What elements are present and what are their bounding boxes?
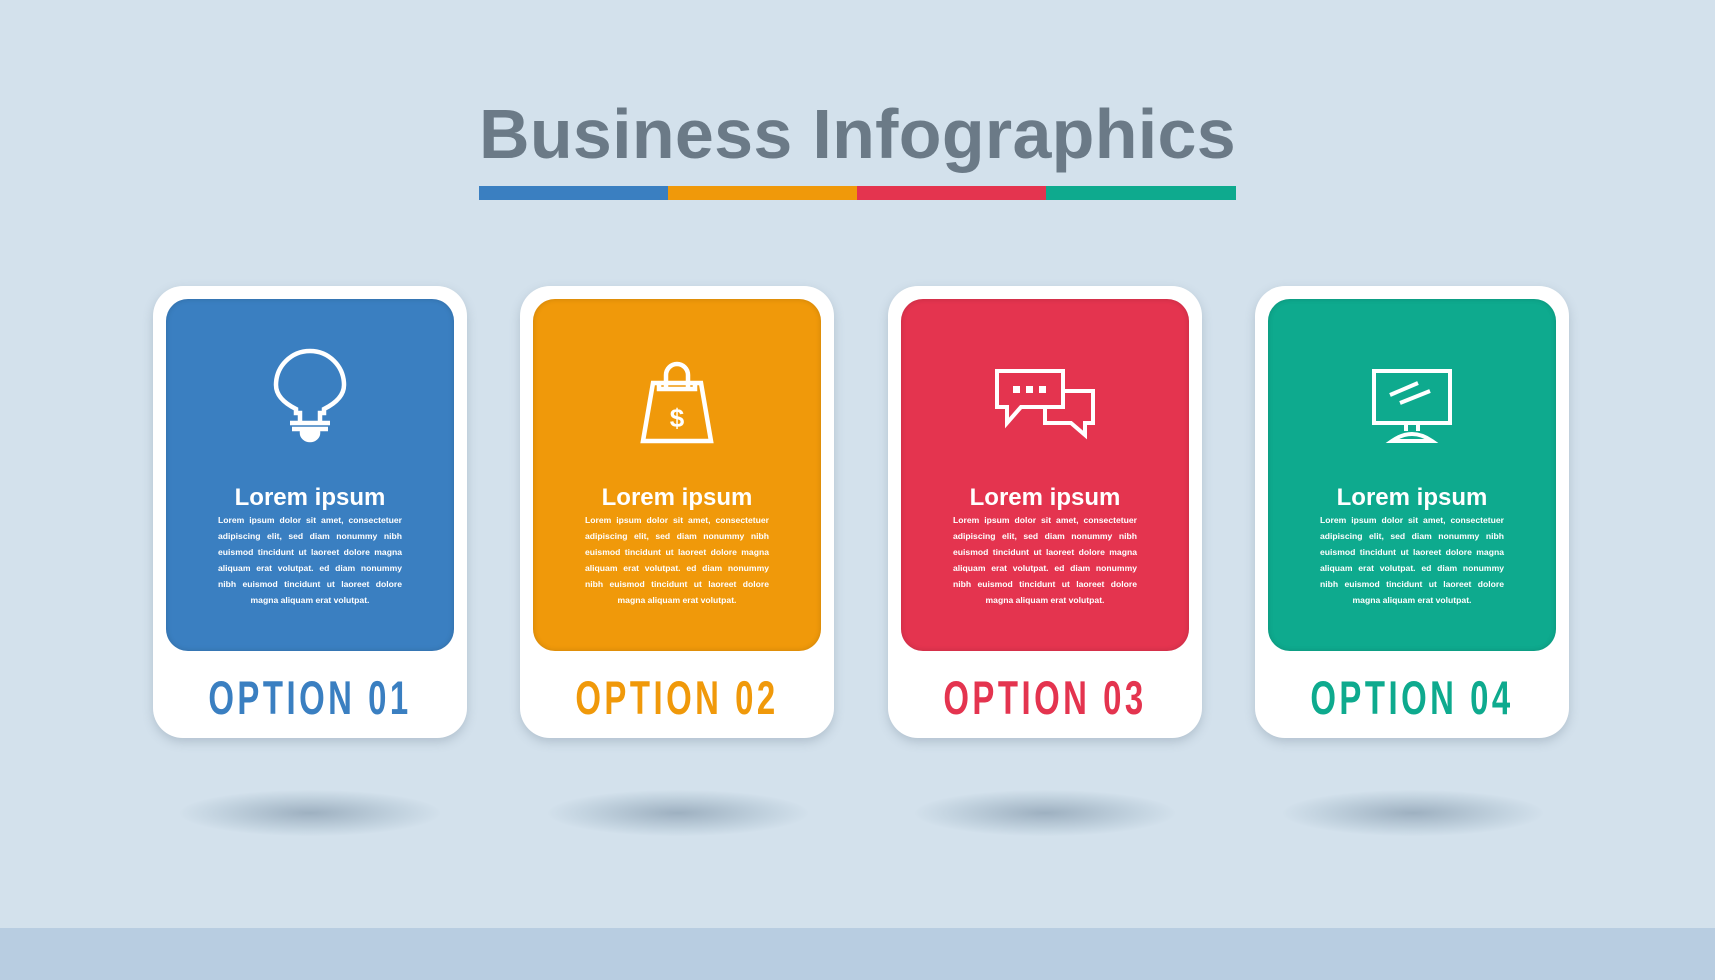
- label: OPTION 01: [208, 671, 412, 724]
- label: OPTION 03: [943, 671, 1147, 724]
- body text: Lorem ipsum dolor sit amet, consectetuer adipiscing elit, sed diam nonummy nibh euismod tincidunt ut laoreet dolore magna aliquam erat volutpat. ed diam nonummy nibh euismod tincidunt ut laoreet dolore magna aliquam erat volutpat.: [218, 515, 402, 605]
- body text: Lorem ipsum dolor sit amet, consectetuer adipiscing elit, sed diam nonummy nibh euismod tincidunt ut laoreet dolore magna aliquam erat volutpat. ed diam nonummy nibh euismod tincidunt ut laoreet dolore magna aliquam erat volutpat.: [1320, 515, 1504, 605]
- heading: Lorem ipsum: [602, 484, 752, 511]
- icon: monitor: [1372, 369, 1452, 443]
- shadow 1: [180, 790, 440, 836]
- shadow 2: [548, 790, 808, 836]
- body text: Lorem ipsum dolor sit amet, consectetuer adipiscing elit, sed diam nonummy nibh euismod tincidunt ut laoreet dolore magna aliquam erat volutpat. ed diam nonummy nibh euismod tincidunt ut laoreet dolore magna aliquam erat volutpat.: [953, 515, 1137, 605]
- heading: Lorem ipsum: [970, 484, 1120, 511]
- title underline: [479, 186, 1236, 200]
- panel: option 02: [520, 286, 834, 738]
- panel: option 03: [888, 286, 1202, 738]
- heading: Lorem ipsum: [1337, 484, 1487, 511]
- label: OPTION 02: [575, 671, 779, 724]
- panel: option 01: [153, 286, 467, 738]
- shadow 4: [1283, 790, 1543, 836]
- heading: Lorem ipsum: [235, 484, 385, 511]
- icon: shopping bag: [640, 362, 714, 444]
- body text: Lorem ipsum dolor sit amet, consectetuer adipiscing elit, sed diam nonummy nibh euismod tincidunt ut laoreet dolore magna aliquam erat volutpat. ed diam nonummy nibh euismod tincidunt ut laoreet dolore magna aliquam erat volutpat.: [585, 515, 769, 605]
- icon: light bulb: [274, 348, 346, 442]
- icon: shopping bag: $: [670, 403, 685, 433]
- panel: option 04: [1255, 286, 1569, 738]
- label: OPTION 04: [1310, 671, 1514, 724]
- shadow 3: [915, 790, 1175, 836]
- title: Business Infographics: [479, 95, 1236, 173]
- bottom band: [0, 928, 1715, 980]
- icon: chat bubbles: [995, 369, 1095, 440]
